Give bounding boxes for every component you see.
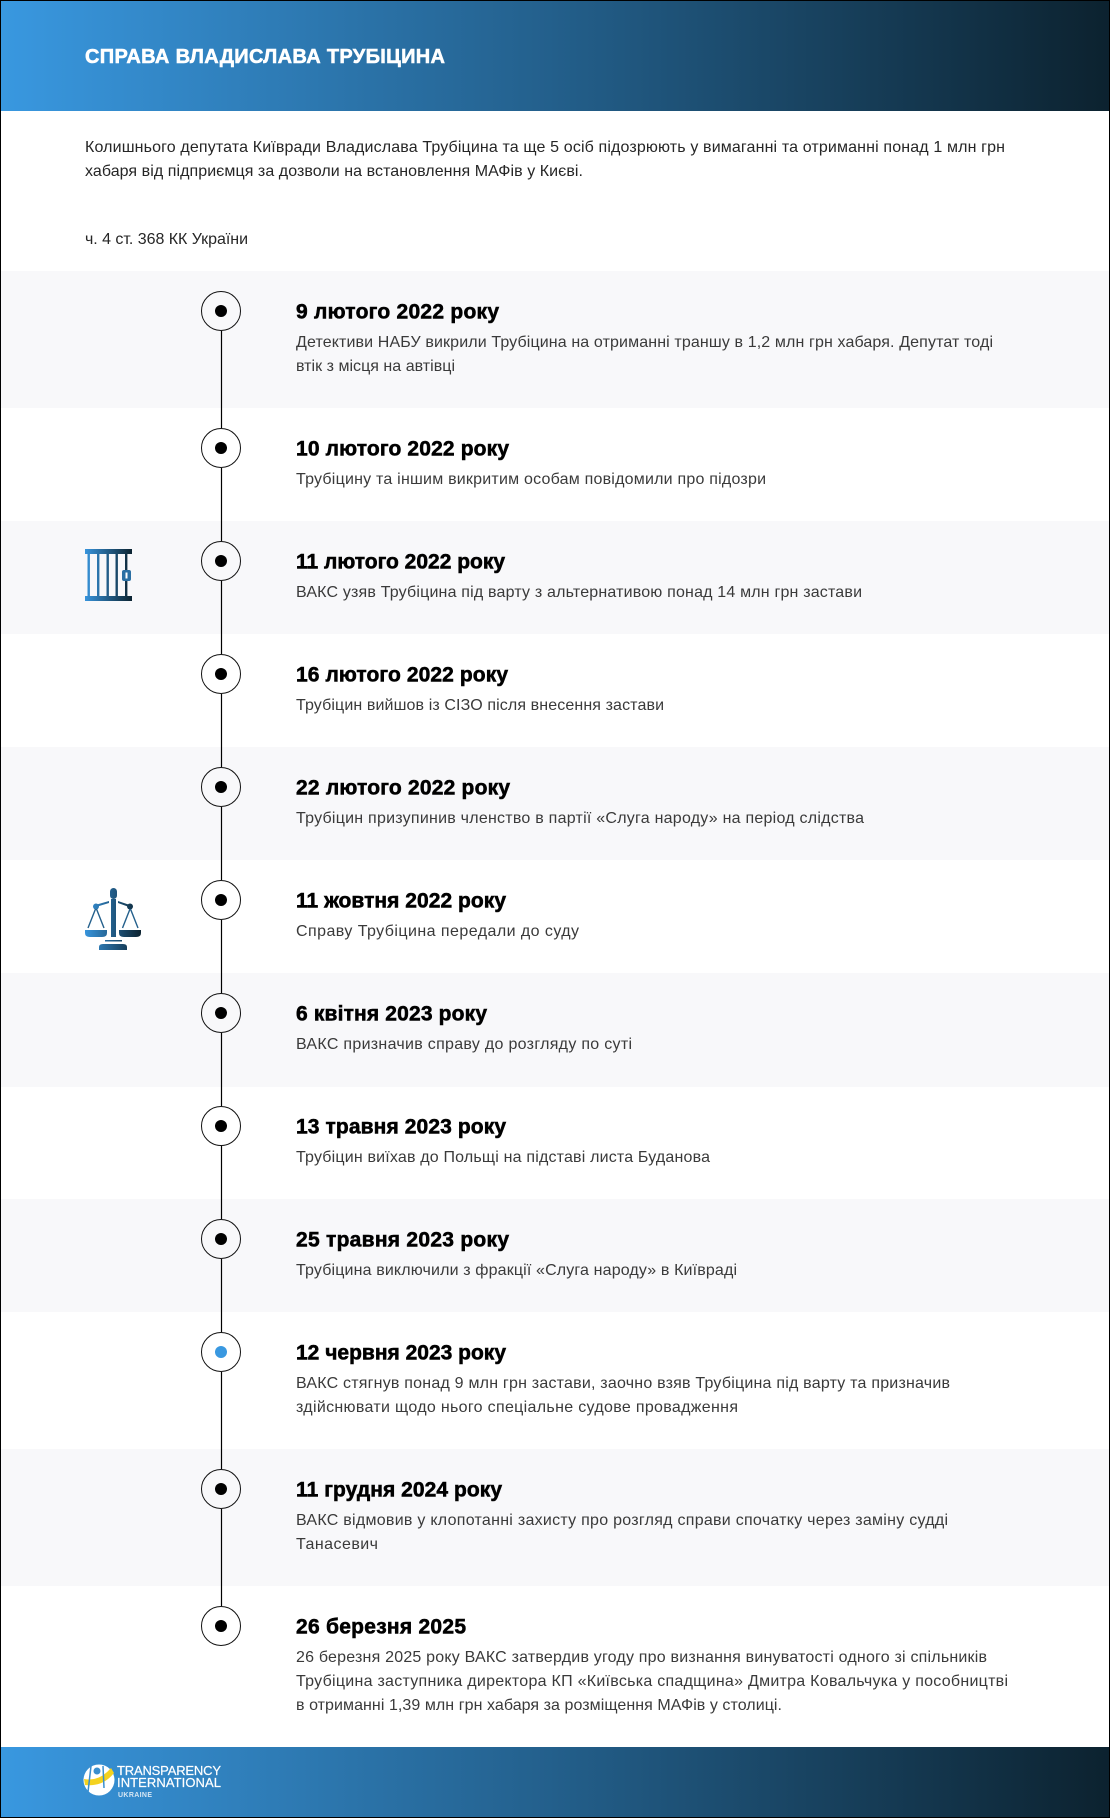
- event: 25 травня 2023: Трубіцина виключили з фракції «Слуга народу» в Київраді: [296, 1262, 737, 1279]
- event: 9 лютого 2022: Детективи НАБУ викрили Трубіцина на отриманні траншу в 1,2 млн грн хабаря. Депутат тоді: [296, 334, 993, 351]
- event: 11 лютого 2022: [202, 542, 862, 601]
- event: 11 жовтня 2022: [202, 880, 579, 940]
- event: 26 березня 2025: 26 березня 2025 року ВАКС затвердив угоду про визнання винуватості одного зі спільників: [296, 1649, 987, 1666]
- event: 25 травня 2023: [202, 1220, 737, 1279]
- footer band: [1, 1747, 1109, 1817]
- event: 9 лютого 2022: втік з місця на автівці: [296, 358, 455, 375]
- event: 13 травня 2023: [202, 1106, 710, 1166]
- event: 10 лютого 2022: Трубіцину та іншим викритим особам повідомили про підозри: [296, 471, 766, 488]
- event: 12 червня 2023: здійснювати щодо нього спеціальне судове провадження: [296, 1399, 738, 1416]
- intro text: [85, 139, 1005, 180]
- logo: Transparency International Ukraine: [84, 1763, 221, 1799]
- row backgrounds: [1, 271, 1109, 1586]
- event: 22 лютого 2022: 22 лютого 2022 року: [296, 776, 510, 800]
- intro text: хабаря від підприємця за дозволи на встановлення МАФів у Києві.: [85, 163, 583, 180]
- event: 11 грудня 2024: 11 грудня 2024 року: [296, 1478, 502, 1502]
- event: 16 лютого 2022: 16 лютого 2022 року: [296, 664, 508, 686]
- header band: [1, 1, 1109, 111]
- event: 11 грудня 2024: ВАКС відмовив у клопотанні захисту про розгляд справи спочатку через заміну судді: [296, 1512, 948, 1529]
- event: 26 березня 2025: 26 березня 2025: [296, 1616, 466, 1638]
- event: 6 квітня 2023: ВАКС призначив справу до розгляду по суті: [296, 1036, 632, 1053]
- event: 13 травня 2023: 13 травня 2023 року: [296, 1116, 506, 1138]
- logo: Transparency International Ukraine: TRANSPARENCY: [117, 1763, 221, 1778]
- event: 10 лютого 2022: [202, 428, 766, 488]
- event: 26 березня 2025: в отриманні 1,39 млн грн хабаря за розміщення МАФів у столиці.: [296, 1697, 782, 1714]
- title: СПРАВА ВЛАДИСЛАВА ТРУБІЦИНА: [85, 46, 445, 68]
- legal article reference: ч. 4 ст. 368 КК України: [85, 231, 248, 248]
- event: 13 травня 2023: Трубіцин виїхав до Польщі на підставі листа Буданова: [296, 1149, 710, 1166]
- icon: scales of justice: [85, 888, 141, 950]
- icon: prison bars: [85, 549, 132, 601]
- event: 22 лютого 2022: [202, 768, 864, 827]
- event: 11 жовтня 2022: Справу Трубіцина передали до суду: [296, 923, 579, 940]
- event: 11 жовтня 2022: 11 жовтня 2022 року: [296, 890, 506, 912]
- event: 25 травня 2023: 25 травня 2023 року: [296, 1228, 509, 1252]
- event: 26 березня 2025: [202, 1606, 1008, 1714]
- event: 12 червня 2023: ВАКС стягнув понад 9 млн грн застави, заочно взяв Трубіцина під варту та призначив: [296, 1375, 950, 1392]
- event: 12 червня 2023: 12 червня 2023 року: [296, 1342, 506, 1364]
- event: 9 лютого 2022: 9 лютого 2022 року: [296, 300, 499, 324]
- event: 22 лютого 2022: Трубіцин призупинив членство в партії «Слуга народу» на період слідства: [296, 810, 864, 827]
- event: 6 квітня 2023: [202, 994, 632, 1053]
- event: 11 грудня 2024: Танасевич: [296, 1536, 378, 1553]
- logo: Transparency International Ukraine: UKRAINE: [118, 1792, 152, 1799]
- intro text: Колишнього депутата Київради Владислава Трубіцина та ще 5 осіб підозрюють у вимаганні та отриманні понад 1 млн грн: [85, 139, 1005, 156]
- event: 16 лютого 2022: [202, 654, 664, 714]
- event: 16 лютого 2022: Трубіцин вийшов із СІЗО після внесення застави: [296, 697, 664, 714]
- logo: Transparency International Ukraine: INTERNATIONAL: [117, 1775, 221, 1790]
- timeline vertical line: [220, 331, 222, 1606]
- event: 9 лютого 2022: [202, 292, 993, 375]
- event: 12 червня 2023: [202, 1332, 950, 1416]
- event: 11 лютого 2022: ВАКС узяв Трубіцина під варту з альтернативою понад 14 млн грн застави: [296, 584, 862, 601]
- event: 6 квітня 2023: 6 квітня 2023 року: [296, 1002, 487, 1026]
- event: 26 березня 2025: Трубіцина заступника директора КП «Київська спадщина» Дмитра Ковальчука у пособництві: [296, 1673, 1008, 1690]
- event: 11 грудня 2024: [202, 1470, 948, 1553]
- event: 10 лютого 2022: 10 лютого 2022 року: [296, 438, 509, 460]
- event: 11 лютого 2022: 11 лютого 2022 року: [296, 550, 505, 574]
